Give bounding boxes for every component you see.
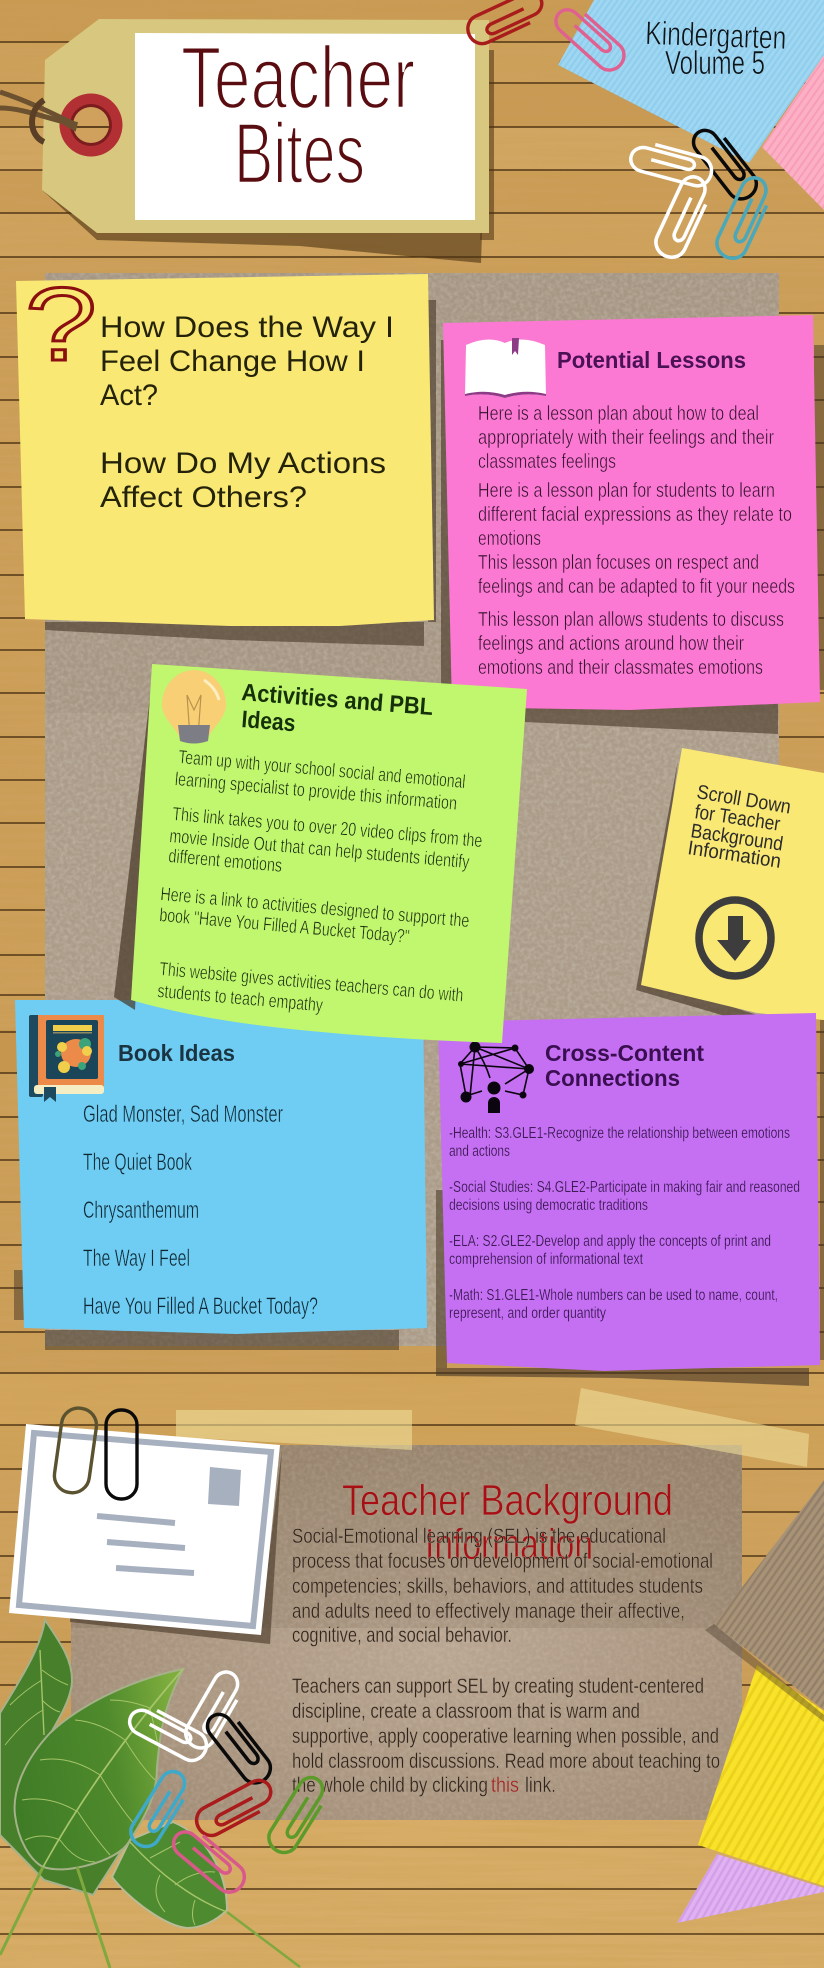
scroll down text: Scroll Down — [695, 781, 793, 819]
heading: Connections — [545, 1065, 680, 1091]
background text: competencies; skills, behaviors, and attitudes students — [292, 1574, 703, 1598]
background text: Social-Emotional learning (SEL) is the educational — [292, 1524, 666, 1548]
panel: scroll down note — [636, 748, 824, 1020]
heading: Potential Lessons — [557, 347, 746, 373]
panel: book ideas — [14, 1000, 427, 1350]
panel: teacher background paper — [71, 1445, 742, 1820]
leaf lower — [112, 1822, 227, 1928]
background text: the whole child by clicking — [292, 1773, 488, 1797]
questions text: Act? — [100, 379, 158, 412]
icon: question mark: ? — [25, 267, 97, 383]
activities list: Here is a link to activities designed to support the — [160, 884, 470, 932]
book list: Glad Monster, Sad Monster — [83, 1101, 283, 1128]
activities list: Team up with your school social and emotional — [178, 747, 466, 793]
striped paper: blue top right — [558, 0, 824, 163]
background text: this — [491, 1773, 519, 1797]
activities list: learning specialist to provide this information — [174, 769, 458, 815]
paper clip white horizontal — [628, 139, 715, 189]
striped paper: pink top right — [762, 55, 824, 210]
questions text: Feel Change How I — [100, 345, 365, 378]
leaves — [0, 1620, 300, 1968]
title: Teacher — [181, 28, 415, 127]
leaf back — [0, 1620, 125, 1895]
paper clip black — [688, 122, 762, 205]
heading: Book Ideas — [118, 1040, 235, 1066]
kraft paper backing panel — [45, 273, 779, 1346]
activities list: different emotions — [168, 846, 283, 877]
paper clip blue — [126, 1767, 194, 1852]
lesson list: emotions — [478, 528, 541, 550]
scroll down text: for Teacher — [693, 801, 782, 836]
book list: The Quiet Book — [83, 1149, 193, 1176]
standards list: represent, and order quantity — [449, 1305, 606, 1322]
icon: tag string — [0, 92, 75, 142]
icon: light bulb — [162, 670, 226, 744]
questions text: Affect Others? — [100, 481, 307, 514]
paper clip pink — [551, 1, 630, 76]
leaf veins and stems — [0, 1650, 300, 1968]
title — [181, 28, 415, 202]
heading: Ideas — [241, 706, 296, 737]
postcard — [9, 1424, 282, 1644]
icon: book — [29, 1015, 104, 1102]
standards list: and actions — [449, 1143, 510, 1160]
activities list: This link takes you to over 20 video clips from the — [172, 804, 483, 852]
icon: stamp — [208, 1467, 241, 1506]
striped paper: brown cardboard — [705, 1480, 824, 1722]
paper clip black on postcard — [106, 1410, 137, 1499]
background text: link. — [525, 1773, 556, 1797]
icon: network — [458, 1042, 534, 1113]
book list: The Way I Feel — [83, 1245, 190, 1272]
grade and volume label: Volume 5 — [665, 44, 765, 81]
icon: open book — [465, 338, 546, 398]
lesson list — [478, 403, 795, 679]
background text: Teachers can support SEL by creating student-centered — [292, 1674, 704, 1698]
grade and volume label — [645, 14, 787, 81]
questions text: How Does the Way I — [100, 311, 394, 344]
panel: activities and PBL ideas — [114, 664, 527, 1043]
paper clip white diagonal — [651, 173, 714, 262]
paper tag — [0, 19, 494, 263]
paper clip olive — [52, 1406, 99, 1495]
standards list — [449, 1125, 800, 1322]
background text: cognitive, and social behavior. — [292, 1623, 512, 1647]
heading: Information — [425, 1520, 593, 1569]
scroll down text: Background — [689, 820, 784, 856]
paper clip red lower — [192, 1776, 278, 1840]
striped paper: lilac triangle — [677, 1854, 824, 1923]
scroll down text — [686, 781, 793, 873]
panel: essential questions — [16, 267, 436, 646]
paper clip green — [264, 1773, 332, 1858]
background text — [292, 1524, 720, 1797]
background text: discipline, create a classroom that is warm and — [292, 1699, 640, 1723]
activities list: students to teach empathy — [157, 981, 324, 1016]
lesson list: classmates feelings — [478, 451, 616, 473]
icon: tag eyelet — [60, 94, 122, 156]
paper clip white A — [181, 1668, 247, 1753]
lesson list: feelings and actions around how their — [478, 633, 744, 655]
paper clip pink lower — [169, 1823, 250, 1898]
panel: potential lessons — [441, 315, 824, 734]
scroll down text: Information — [686, 837, 782, 873]
lesson list: Here is a lesson plan about how to deal — [478, 403, 759, 425]
heading — [545, 1040, 704, 1091]
heading — [241, 679, 434, 737]
heading: Activities and PBL — [241, 679, 434, 721]
activities list — [157, 747, 483, 1016]
heading: Teacher Background — [342, 1476, 673, 1525]
heading — [342, 1476, 673, 1569]
white label card — [135, 33, 475, 220]
panel: cross-content connections — [436, 1013, 824, 1386]
questions text — [100, 311, 394, 514]
paper clip teal — [712, 174, 775, 263]
heading: Cross-Content — [545, 1040, 704, 1066]
activities list: This website gives activities teachers can do with — [159, 959, 464, 1007]
paper clip white B — [125, 1701, 211, 1765]
background text: process that focuses on development of social-emotional — [292, 1549, 713, 1573]
book list — [83, 1101, 318, 1320]
book list: Have You Filled A Bucket Today? — [83, 1293, 318, 1320]
striped paper: yellow lower right — [698, 1665, 824, 1886]
icon: down arrow in circle — [699, 900, 771, 976]
activities list: movie Inside Out that can help students identify — [169, 826, 471, 873]
book list: Chrysanthemum — [83, 1197, 199, 1224]
activities list: book "Have You Filled A Bucket Today?" — [159, 905, 410, 948]
title: Bites — [234, 106, 365, 202]
paper clip black lower — [202, 1706, 276, 1789]
leaf front — [15, 1669, 183, 1869]
background text: and adults need to effectively manage their affective, — [292, 1599, 685, 1623]
tape strips — [176, 1388, 809, 1467]
address lines — [97, 1516, 194, 1573]
paper clip red — [463, 0, 548, 48]
standards list: decisions using democratic traditions — [449, 1197, 648, 1214]
questions text: How Do My Actions — [100, 447, 386, 480]
standards list: comprehension of informational text — [449, 1251, 644, 1268]
